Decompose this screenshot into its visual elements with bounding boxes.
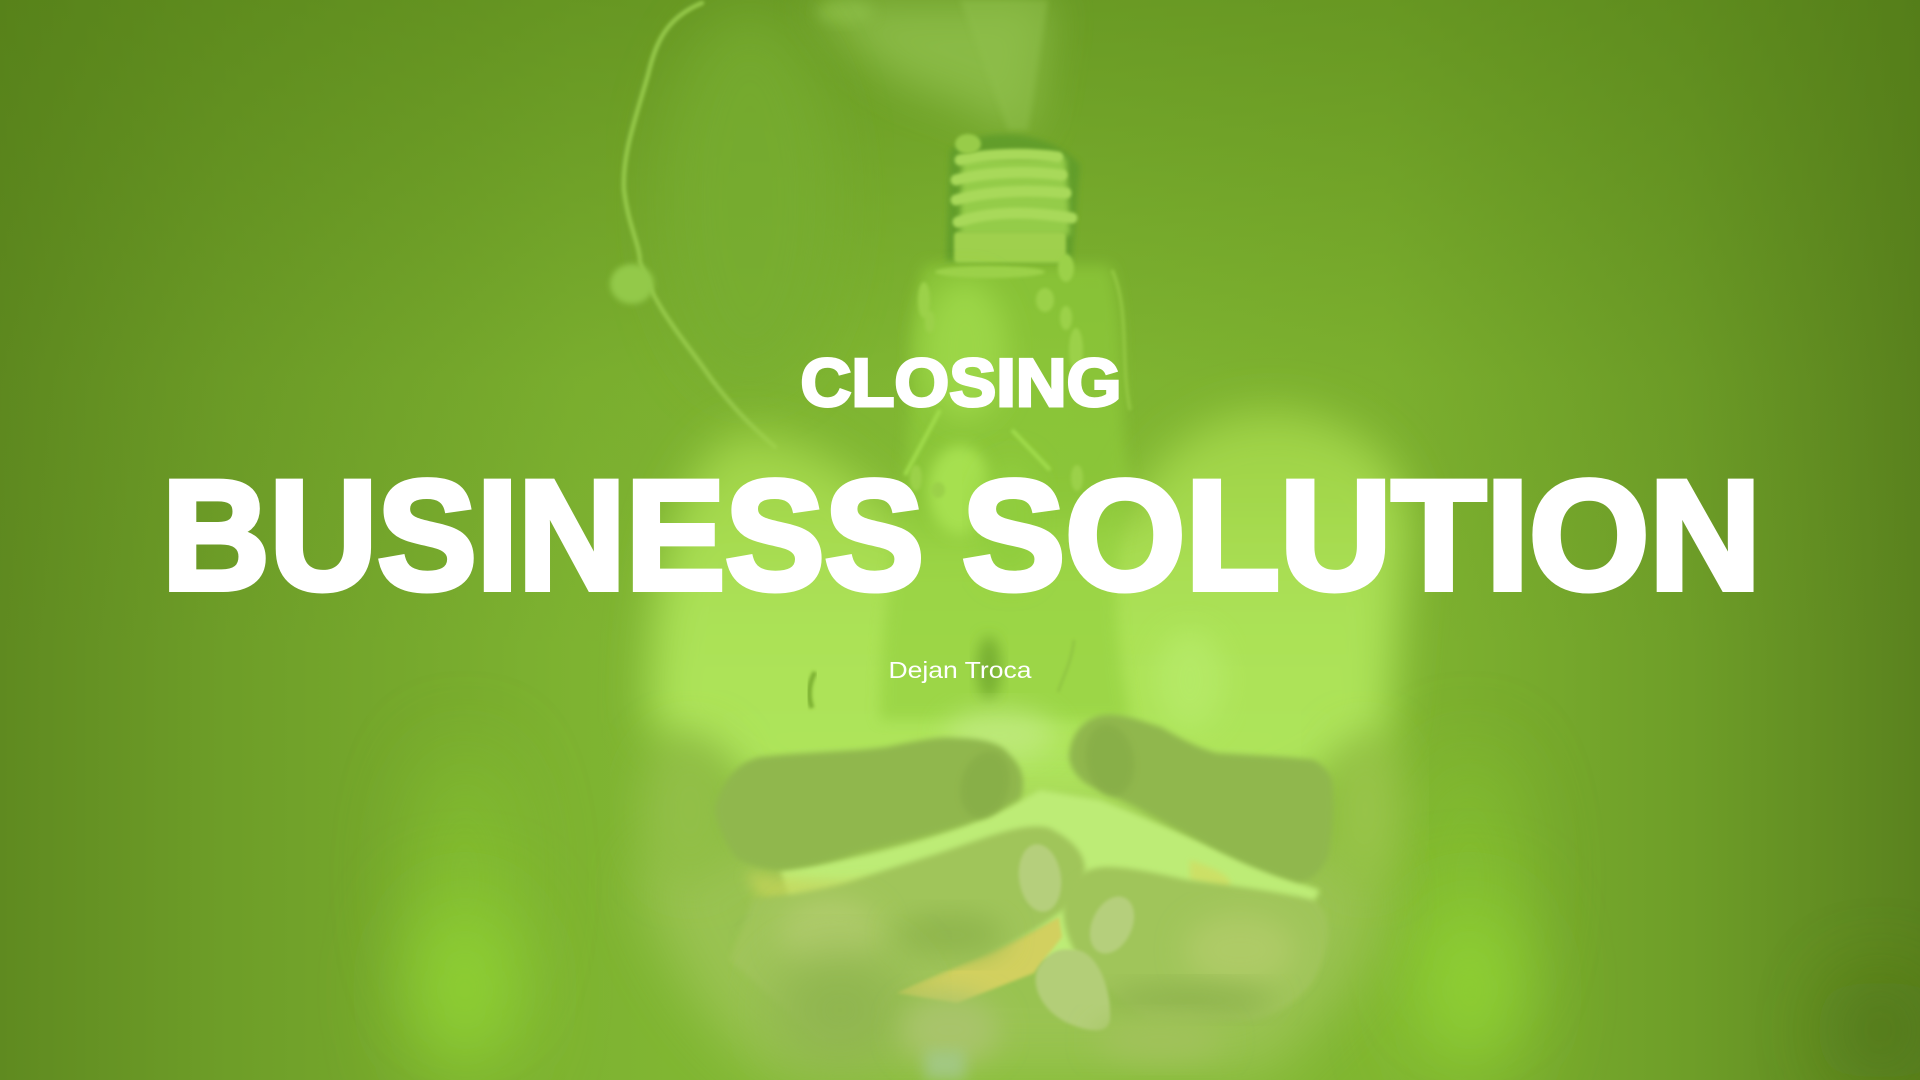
bottom finger — [1036, 949, 1110, 1030]
photo: right thumb — [1069, 715, 1333, 882]
photo: hand edges fading beside the thumbs — [640, 735, 1405, 885]
bulb socket — [946, 134, 1080, 263]
right lower finger — [1063, 867, 1328, 1020]
bulb glass — [809, 254, 1225, 761]
photo: light bulb — [809, 134, 1225, 761]
photo: lower fingers — [730, 827, 1328, 1080]
photo: glowing palm and yellow light — [745, 790, 1320, 1003]
title: business solution: SOLUTION — [962, 449, 1761, 623]
photo: hands glow — [640, 410, 1409, 1075]
author name: Dejan Troca — [888, 657, 1032, 683]
photo: left thumb — [715, 737, 1023, 870]
subtitle: closing: CLOSING — [800, 345, 1122, 421]
left lower finger — [730, 827, 1085, 1040]
photo: hanging wire — [610, 3, 775, 447]
photo: light beam above the bulb — [660, 0, 1050, 390]
title: business solution: BUSINESS — [162, 449, 924, 623]
